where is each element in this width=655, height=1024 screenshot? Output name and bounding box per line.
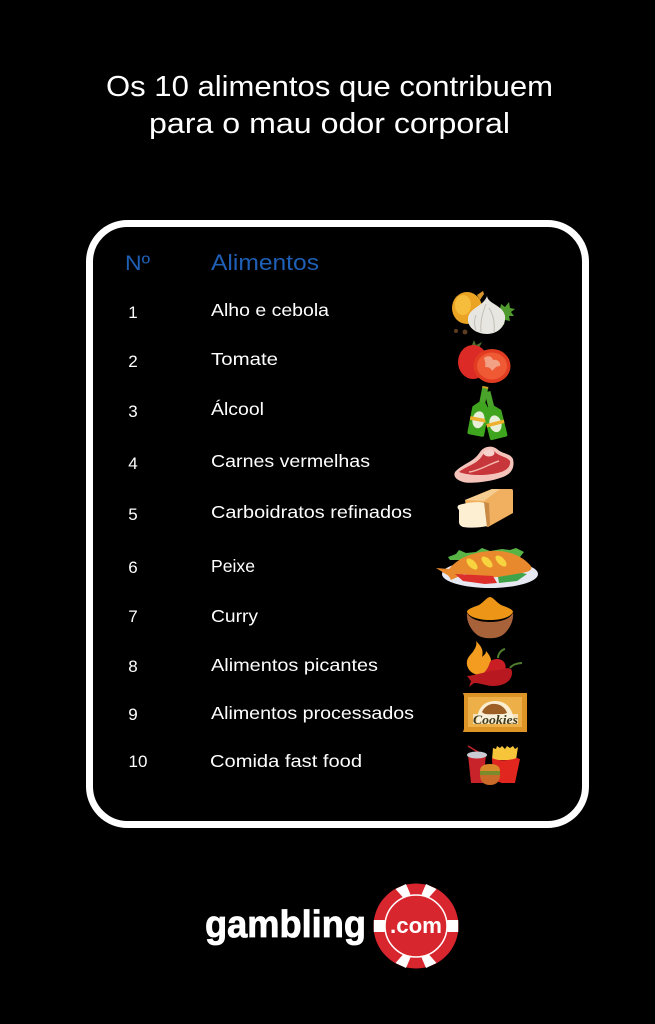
row 3: 3 (128, 402, 138, 421)
logo chip (374, 884, 458, 968)
icon: tomato (458, 340, 510, 383)
icon: fish plate (436, 548, 538, 588)
row 9 (128, 703, 414, 724)
panel: food table frame (90, 224, 586, 824)
row 6: Peixe (211, 556, 255, 576)
row 9: 9 (128, 705, 138, 724)
row 5: Carboidratos refinados (211, 502, 412, 522)
row 1: Alho e cebola (211, 300, 329, 320)
row 8 (128, 655, 378, 676)
row 3: Álcool (211, 399, 264, 419)
logo wordmark: gambling (205, 904, 366, 946)
icon: bread loaf (458, 489, 513, 528)
icon: fast food (467, 746, 520, 785)
table header: Alimentos (211, 250, 319, 275)
row 2: 2 (128, 352, 138, 371)
logo: gambling.com (205, 884, 458, 968)
row 7: 7 (128, 607, 138, 626)
title: para o mau odor corporal (149, 108, 510, 140)
icon: chili and flame (467, 641, 522, 687)
row 10 (129, 751, 362, 771)
row 10: Comida fast food (210, 751, 362, 771)
row 2: Tomate (211, 349, 278, 369)
row 8: 8 (128, 657, 138, 676)
row 6: 6 (128, 558, 138, 577)
row 4: 4 (128, 454, 138, 473)
icon: curry bowl (467, 597, 513, 638)
row 1 (128, 300, 329, 322)
row 4 (128, 451, 370, 473)
table header (125, 250, 319, 275)
logo chip: .com (390, 913, 442, 938)
row 5: 5 (128, 505, 138, 524)
icon: cookies package: Cookies (473, 713, 518, 727)
row 9: Alimentos processados (211, 703, 414, 723)
row 6 (128, 556, 255, 577)
row 5 (128, 502, 412, 524)
row 7 (128, 606, 258, 626)
row 3 (128, 399, 264, 421)
icon: cookies package (463, 693, 527, 732)
row 8: Alimentos picantes (211, 655, 378, 675)
row 7: Curry (211, 606, 258, 626)
row 4: Carnes vermelhas (211, 451, 370, 471)
row 10: 10 (129, 752, 147, 771)
title (106, 71, 553, 140)
icon: onion and garlic (452, 291, 515, 334)
icon: red meat (454, 447, 514, 483)
row 2 (128, 349, 278, 371)
row 1: 1 (128, 303, 138, 322)
icon: beer bottles (467, 385, 508, 440)
table header: Nº (125, 252, 150, 275)
title: Os 10 alimentos que contribuem (106, 71, 553, 103)
